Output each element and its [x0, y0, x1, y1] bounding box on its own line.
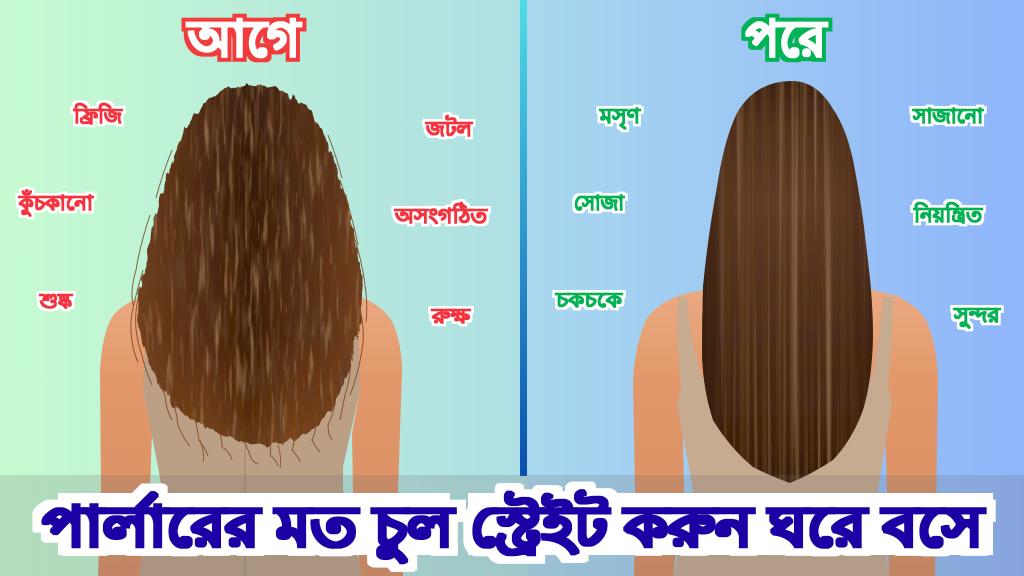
labels: after traits [555, 105, 1002, 328]
hair: straight [702, 81, 873, 483]
label: smooth: মসৃণ [599, 105, 641, 130]
label: unorganised: অসংগঠিত [394, 202, 488, 228]
bottom translucent band [0, 475, 1024, 576]
tank top: before [140, 310, 362, 576]
label: rough: রুক্ষ [431, 305, 471, 328]
label: controlled: নিয়ন্ত্রিত [913, 202, 983, 227]
tank top seam [244, 440, 246, 576]
label: straight: সোজা [574, 192, 625, 215]
tank top: after [673, 297, 893, 576]
figure: woman before, frizzy hair [98, 85, 403, 576]
panel: before background [0, 0, 520, 576]
bottom title [43, 490, 993, 563]
heading: after: পরে [746, 11, 827, 67]
figure: woman after, straight hair [633, 81, 938, 576]
label: curled: কুঁচকানো [18, 190, 94, 216]
title text: পার্লারের মত চুল স্ট্রেইট করুন ঘরে বসে [43, 490, 985, 563]
hair: frizzy [131, 85, 367, 468]
heading: before: আগে [186, 11, 302, 67]
label: frizzy: ফ্রিজি [73, 103, 123, 128]
body: before [98, 296, 403, 576]
centre divider [520, 0, 527, 476]
label: shiny: চকচকে [555, 289, 623, 312]
label: beautiful: সুন্দর [953, 304, 1002, 328]
stray strands [131, 135, 367, 468]
body: after [633, 290, 938, 576]
labels: before traits [18, 103, 488, 328]
title backing plates [58, 493, 993, 555]
label: styled: সাজানো [912, 105, 984, 128]
label: tangled: জটল [425, 115, 473, 141]
panel: after background [527, 0, 1024, 576]
label: dry: শুষ্ক [39, 290, 73, 313]
